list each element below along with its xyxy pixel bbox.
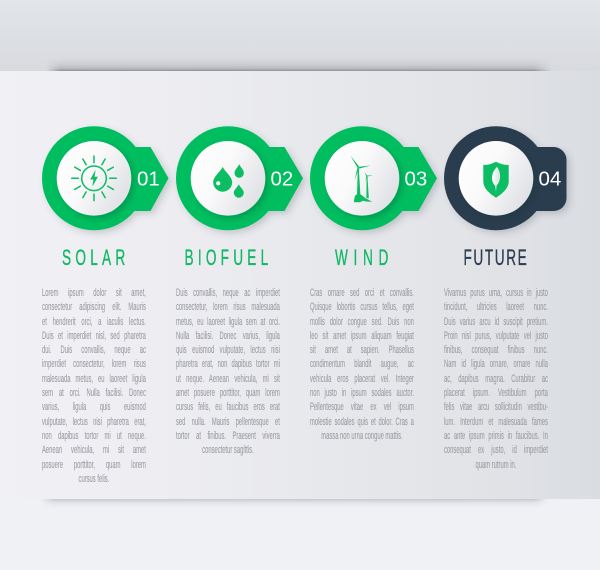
panel: solar	[42, 126, 174, 485]
number 04: 04	[538, 168, 561, 191]
text block: biofuel: pharetra erat, non dapibus tortor mi	[176, 358, 279, 370]
heading: wind: WIND	[334, 245, 388, 270]
text block: biofuel: Nulla facilisi. Donec varius, ligula	[176, 330, 279, 342]
text block: future: Duis varius arcu id suscipit pretium.	[444, 316, 547, 328]
icon: drops	[213, 164, 243, 198]
text block: biofuel: consectetur sagittis.	[202, 444, 253, 456]
text block: solar: sem at orci. Nulla facilisi. Donec	[42, 387, 145, 399]
text block: solar: Duis et imperdiet nisl, sed pharetra	[42, 330, 145, 342]
text block: wind: sit amet at sapien. Phasellus	[310, 344, 413, 356]
text block: future: ac, dapibus magna. Curabitur ac	[444, 373, 547, 385]
text block: solar: Lorem ipsum dolor sit amet,	[42, 287, 145, 299]
icon: sun with bolt	[71, 156, 116, 201]
text block: future: Nam id ligula ornare, ornare nulla	[444, 358, 547, 370]
text block: solar: vulputate, lectus nisi pharetra erat,	[42, 416, 145, 428]
badge: wind	[310, 126, 436, 230]
text block: future: consequat ex justo, id imperdiet	[444, 444, 547, 456]
text block: solar: posuere porttitor, quam lorem	[42, 459, 145, 471]
text block: wind: Quisque lobortis cursus tellus, eget	[310, 301, 413, 313]
text block: solar	[42, 287, 146, 485]
text block: wind: mollis dolor congue sed. Duis non	[310, 316, 413, 328]
text block: wind: leo sit amet ipsum aliquam feugiat	[310, 330, 413, 342]
text block: biofuel: quis euismod vulputate, lectus nisi	[176, 344, 279, 356]
icon: wind turbines	[350, 156, 373, 202]
icon: shield with leaf	[483, 162, 508, 198]
text block: solar: malesuada metus, eu laoreet ligula	[42, 373, 145, 385]
text block: biofuel: ut neque. Aenean vehicula, mi sit	[176, 373, 279, 385]
text block: future: Proin nisl purus, vulputate vel justo	[444, 330, 547, 342]
text block: wind: molestie sodales quis et dolor. Cras a	[310, 416, 413, 428]
text block: wind: vehicula eros placerat vel. Integer	[310, 373, 413, 385]
panel: biofuel	[176, 126, 308, 456]
badge: future	[444, 126, 566, 230]
heading: biofuel: BIOFUEL	[184, 245, 268, 270]
text block: future: lum. Interdum et malesuada fames	[444, 416, 547, 428]
text block: solar: et hendrerit orci, a iaculis lectus.	[42, 316, 145, 328]
text block: solar: dui. Duis convallis, neque ac	[42, 344, 145, 356]
text block: future: quam rutrum in.	[475, 459, 516, 471]
text block: biofuel	[176, 287, 280, 456]
badge: biofuel	[176, 126, 302, 230]
text block: wind: massa non urna congue mattis.	[321, 430, 402, 442]
text block: future: tincidunt, ultricies laoreet nunc.	[444, 301, 547, 313]
text block: wind: non justo in ipsum sodales auctor.	[310, 387, 413, 399]
panel: wind	[310, 126, 442, 442]
background panel	[0, 71, 600, 499]
panel: future	[444, 126, 572, 471]
badge: solar	[42, 126, 168, 230]
text block: future: ac ante ipsum primis in faucibus. In	[444, 430, 547, 442]
text block: future: Vivamus purus urna, cursus in justo	[444, 287, 547, 299]
text block: solar: non dapibus tortor mi ut neque.	[42, 430, 145, 442]
text block: solar: varius, ligula quis euismod	[42, 401, 145, 413]
text block: biofuel: tortor at finibus. Praesent viverra	[176, 430, 279, 442]
text block: future	[444, 287, 548, 471]
text block: wind: Cras ornare sed orci et convallis.	[310, 287, 413, 299]
text block: wind	[310, 287, 414, 442]
text block: wind: condimentum blandit augue, ac	[310, 358, 413, 370]
panel top shadow	[48, 62, 550, 71]
text block: solar: imperdiet consectetur, lorem risus	[42, 358, 145, 370]
panel bottom shadow	[43, 499, 545, 504]
background top band	[0, 0, 600, 71]
text block: solar: consectetur adipiscing elit. Mauris	[42, 301, 145, 313]
number 01: 01	[136, 168, 159, 191]
text block: future: felis vitae arcu sollicitudin vestibu-	[444, 401, 547, 413]
text block: solar: cursus felis.	[78, 473, 109, 485]
number 03: 03	[404, 168, 427, 191]
text block: biofuel: sed nulla. Mauris pellentesque et	[176, 416, 279, 428]
text block: biofuel: cursus felis, eu faucibus eros erat	[176, 401, 279, 413]
number 02: 02	[270, 168, 293, 191]
text block: biofuel: metus, eu laoreet ligula sem at orci.	[176, 316, 279, 328]
text block: biofuel: amet posuere porttitor, quam lorem	[176, 387, 279, 399]
heading: future: FUTURE	[463, 245, 526, 270]
heading: solar: SOLAR	[62, 245, 125, 270]
text block: biofuel: consectetur, lorem risus malesuada	[176, 301, 279, 313]
text block: biofuel: Duis convallis, neque ac imperdiet	[176, 287, 279, 299]
text block: wind: Pellentesque vitae ex vel ipsum	[310, 401, 413, 413]
text block: future: placerat ipsum. Vestibulum porta	[444, 387, 547, 399]
text block: future: finibus, consequat finibus nunc.	[444, 344, 547, 356]
text block: solar: Aenean vehicula, mi sit amet	[42, 444, 145, 456]
